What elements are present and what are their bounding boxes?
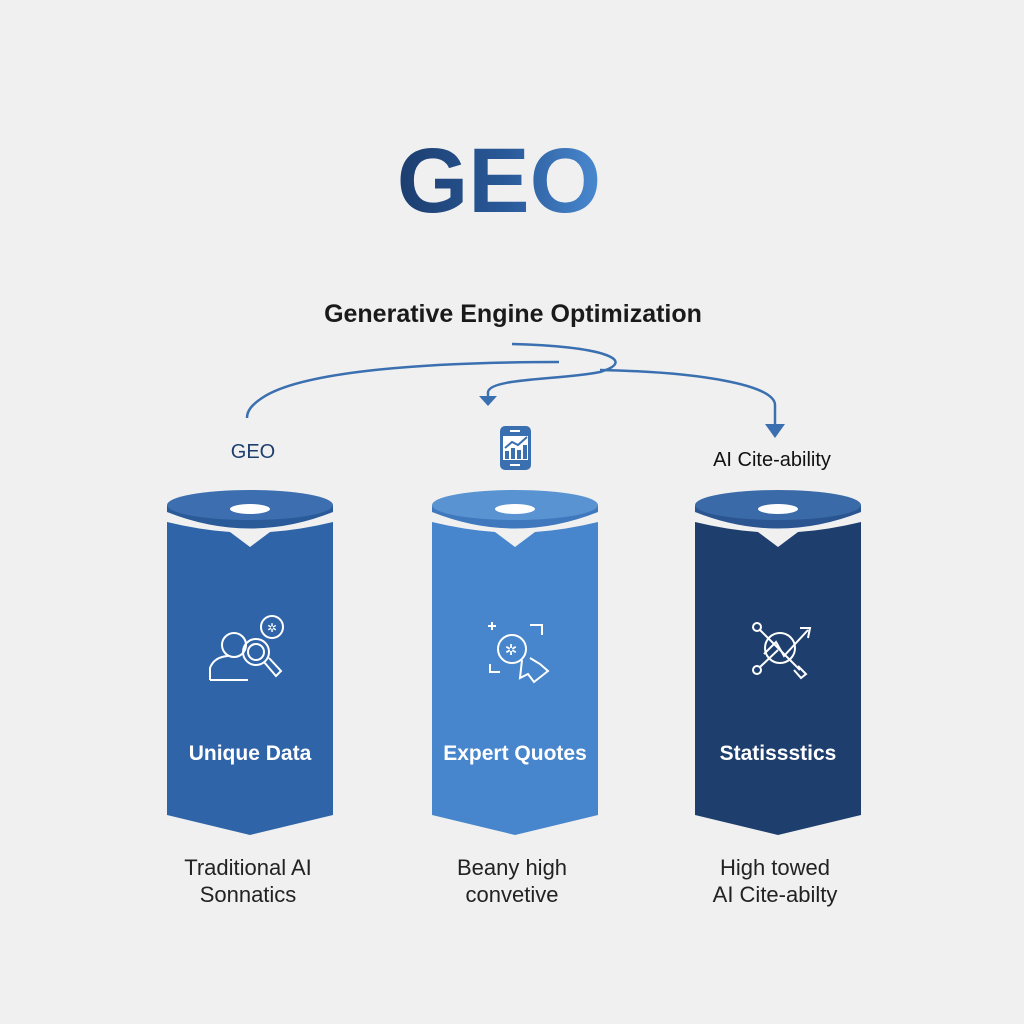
caption: left [184, 855, 312, 907]
caption: right: High towed [720, 855, 830, 880]
cylinder: Unique Data [167, 490, 333, 835]
icon: chart cross [753, 623, 810, 678]
cylinder: Statistics: Statissstics [720, 742, 836, 765]
icon: badge: ✲ [505, 642, 517, 659]
cylinder: Unique Data: Unique Data [189, 742, 312, 765]
arrows [247, 344, 785, 438]
caption: middle: convetive [466, 882, 558, 907]
label: AI Cite-ability: AI Cite-ability [713, 449, 831, 471]
title: GEO [397, 130, 601, 232]
icon: badge [488, 622, 548, 682]
caption: left: Traditional AI [184, 855, 312, 880]
caption: right: AI Cite-abilty [713, 882, 837, 907]
caption: right [713, 855, 837, 907]
subtitle: Generative Engine Optimization [324, 300, 702, 328]
cylinder: Expert Quotes: Expert Quotes [443, 742, 587, 765]
icon: person magnifier [210, 616, 283, 680]
caption: middle: Beany high [457, 855, 567, 880]
icon: phone chart [500, 426, 531, 470]
cylinder: Expert Quotes [432, 490, 598, 835]
cylinder: Statistics [695, 490, 861, 835]
caption: left: Sonnatics [200, 882, 296, 907]
label: GEO: GEO [231, 441, 275, 463]
caption: middle [457, 855, 567, 907]
icon: person magnifier: ✲ [267, 621, 277, 635]
